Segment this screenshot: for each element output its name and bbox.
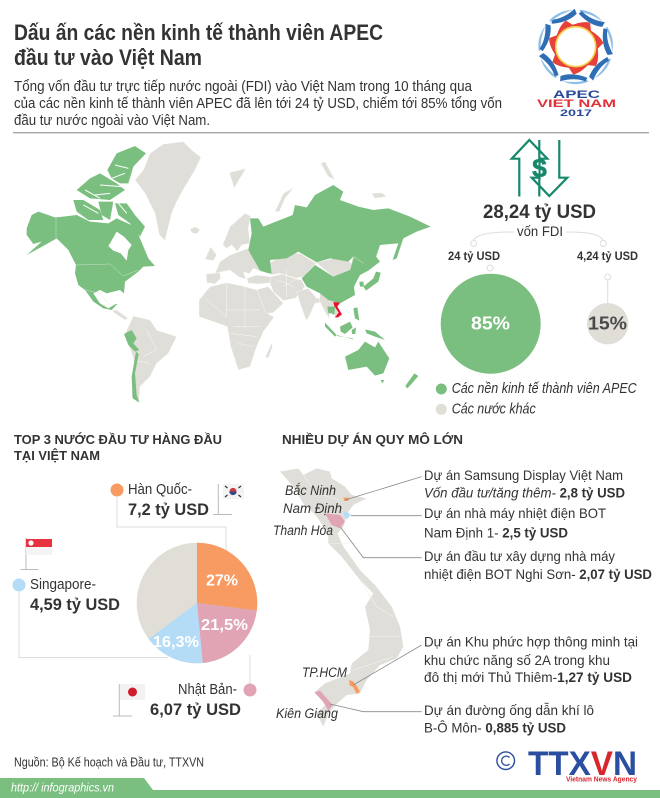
pie chart: 27% (206, 573, 238, 590)
footer band: http:// infographics.vn (11, 781, 114, 795)
icon: Korea flag (213, 484, 244, 514)
label: Japan: 6,07 tỷ USD (150, 701, 241, 719)
Vietnam map (280, 468, 422, 727)
project: Nam Dinh: Nam Định 1- 2,5 tỷ USD (424, 525, 568, 541)
legend (436, 381, 637, 418)
province labels: Kiên Giang (276, 706, 338, 721)
Ho Chi Minh City (349, 680, 360, 694)
logo: APEC Viet Nam 2017: 2017 (560, 108, 592, 118)
footer band (0, 778, 660, 798)
Thanh Hoa (325, 513, 345, 528)
heading: large projects: NHIỀU DỰ ÁN QUY MÔ LỚN (282, 432, 463, 447)
title: Dấu ấn các nền kinh tế thành viên APEC (14, 20, 383, 45)
title (14, 20, 383, 70)
total FDI (471, 202, 606, 246)
country borders (133, 270, 300, 363)
Kien Giang (314, 691, 333, 711)
intro text: đầu tư nước ngoài vào Việt Nam. (14, 113, 210, 129)
project: gas pipeline: Dự án đường ống dẫn khí lô (424, 702, 594, 718)
logo: APEC Viet Nam 2017 (531, 2, 622, 118)
icon: FDI arrows with dollar: $ (532, 153, 547, 183)
pie chart: 21,5% (201, 617, 248, 634)
project: Nghi Son (424, 548, 652, 582)
project: Nghi Son: nhiệt điện BOT Nghi Sơn- 2,07 tỷ USD (424, 566, 652, 582)
bubble: APEC 85% (441, 249, 541, 374)
Hudson Bay and arctic inlets (108, 232, 132, 261)
world map (27, 142, 431, 403)
borders inside APEC economies (56, 217, 363, 303)
intro text: của các nền kinh tế thành viên APEC đã lên tới 24 tỷ USD, chiếm tới 85% tổng vốn (14, 96, 502, 112)
project: Thu Thiem: khu chức năng số 2A trong khu (424, 652, 610, 668)
intro text: Tổng vốn đầu tư trực tiếp nước ngoài (FDI) vào Việt Nam trong 10 tháng qua (14, 79, 473, 95)
project: Thu Thiem: đô thị mới Thủ Thiêm-1,27 tỷ USD (424, 669, 632, 685)
connector lines (19, 497, 250, 684)
province labels: TP.HCM (302, 665, 348, 680)
leader lines (330, 477, 422, 712)
project: Nam Dinh (424, 505, 606, 541)
Bac Ninh (343, 498, 349, 501)
province labels: Bắc Ninh (285, 483, 336, 498)
label: Singapore: 4,59 tỷ USD (30, 596, 120, 614)
label: Korea: 7,2 tỷ USD (128, 501, 209, 519)
heading: top 3 (14, 432, 222, 463)
project: Thu Thiem: Dự án Khu phức hợp thông minh tại (424, 634, 638, 650)
project: Samsung (424, 467, 625, 501)
project: Thu Thiem (424, 634, 638, 685)
bubble: others 15% (577, 249, 638, 344)
bubble: APEC 85%: 24 tỷ USD (448, 249, 500, 263)
heading: top 3: TẠI VIỆT NAM (14, 448, 100, 463)
bubble: APEC 85%: 85% (471, 314, 510, 334)
legend: Các nước khác (452, 402, 536, 418)
bubble: others 15%: 15% (588, 314, 627, 334)
logo: TTXVN: TTXVN (528, 745, 637, 783)
logo: APEC Viet Nam 2017: APEC (553, 89, 600, 101)
province labels (273, 483, 348, 721)
heading: top 3: TOP 3 NƯỚC ĐẦU TƯ HÀNG ĐẦU (14, 432, 222, 447)
label: Singapore: Singapore- (30, 577, 96, 593)
source: Nguồn: Bộ Kế hoạch và Đầu tư, TTXVN (14, 756, 204, 770)
province labels: Thanh Hóa (273, 523, 333, 538)
legend: Các nền kinh tế thành viên APEC (452, 381, 637, 397)
label: Japan (150, 682, 256, 719)
Nam Dinh (343, 511, 351, 519)
gray landmasses (112, 142, 387, 402)
project: gas pipeline (424, 702, 594, 736)
logo: APEC Viet Nam 2017: VIET NAM (537, 98, 616, 110)
logo: TTXVN: Vietnam News Agency (566, 774, 638, 784)
pie chart: 16,3% (153, 634, 199, 651)
project: Nam Dinh: Dự án nhà máy nhiệt điện BOT (424, 505, 606, 521)
project: gas pipeline: B-Ô Môn- 0,885 tỷ USD (424, 720, 566, 736)
project: Samsung: Vốn đầu tư/tăng thêm- 2,8 tỷ USD (424, 485, 625, 501)
pie chart (137, 543, 257, 663)
total FDI: 28,24 tỷ USD (483, 202, 596, 223)
icon: FDI arrows with dollar (512, 140, 567, 196)
APEC economies (27, 146, 431, 403)
total FDI: vốn FDI (517, 223, 563, 239)
project: Nghi Son: Dự án đầu tư xây dựng nhà máy (424, 548, 615, 564)
bubble: others 15%: 4,24 tỷ USD (577, 249, 638, 263)
label: Japan: Nhật Bản- (178, 682, 237, 698)
icon: Singapore flag (20, 538, 52, 570)
label: Korea (110, 482, 209, 519)
label: Korea: Hàn Quốc- (128, 482, 192, 498)
title: đầu tư vào Việt Nam (14, 45, 202, 70)
Vietnam highlight (333, 302, 342, 317)
label: Singapore (12, 577, 120, 614)
intro text (14, 79, 502, 129)
icon: Japan flag (113, 684, 145, 716)
province labels: Nam Định (283, 501, 342, 516)
project: Samsung: Dự án Samsung Display Việt Nam (424, 467, 623, 483)
